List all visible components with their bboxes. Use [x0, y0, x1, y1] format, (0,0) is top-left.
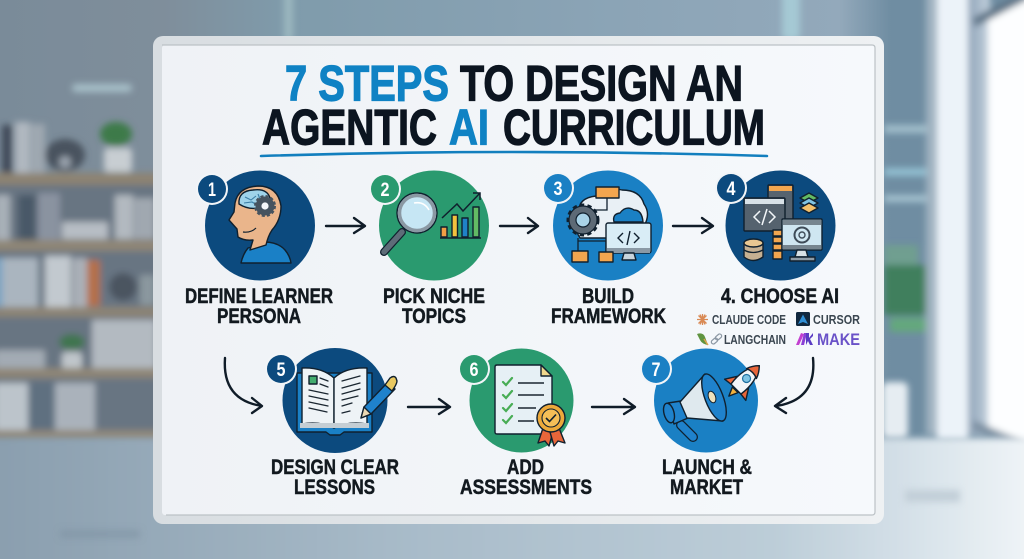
logo: LangChain [697, 333, 786, 347]
step 7: launch and market [640, 348, 770, 499]
label [185, 285, 333, 328]
title: AI [449, 99, 489, 155]
label: BUILD [582, 285, 634, 308]
title [262, 56, 765, 155]
logo: Claude Code: CLAUDE CODE [712, 313, 786, 327]
label: PERSONA [217, 305, 301, 328]
icon: code windows, database and layers [726, 170, 836, 280]
arrow 5 to 6 [408, 399, 450, 414]
label: ADD [507, 456, 544, 479]
label: TOPICS [402, 305, 466, 328]
badge 3 [542, 172, 574, 204]
label [271, 456, 399, 499]
icon: learner head with brain and gear [205, 170, 315, 280]
badge 6: 6 [470, 360, 478, 381]
badge 2: 2 [380, 180, 390, 201]
logo: Make [796, 330, 860, 349]
badge 5: 5 [276, 360, 286, 381]
title underline [261, 152, 767, 156]
step 1: define learner persona [185, 170, 333, 328]
step 3: build framework [542, 170, 666, 328]
badge 2 [369, 173, 401, 205]
arrow 6 to 7 [592, 399, 635, 414]
badge 6 [458, 353, 490, 385]
logo: Make: MAKE [817, 330, 860, 349]
badge 1 [196, 173, 228, 205]
step 4: choose AI [697, 170, 860, 349]
label [383, 285, 485, 328]
panel: whiteboard frame [153, 36, 884, 524]
label [551, 285, 666, 328]
badge 4: 4 [726, 179, 736, 200]
curved arrow into step 5 [225, 358, 262, 413]
arrow 1 to 2 [326, 218, 365, 233]
logo: Cursor: CURSOR [813, 313, 860, 327]
label [460, 456, 592, 499]
step 5: design clear lessons [265, 348, 399, 499]
badge 5 [265, 353, 297, 385]
label: 4. CHOOSE AI [721, 285, 839, 308]
step 2: pick niche topics [369, 170, 489, 328]
logo: Claude Code [697, 313, 786, 327]
icon: magnifier and growth chart [379, 170, 489, 280]
label: LAUNCH & [662, 456, 752, 479]
label: MARKET [670, 476, 743, 499]
label: PICK NICHE [383, 285, 485, 308]
curved arrow from step 4 into step 7 [775, 358, 813, 413]
icon: open book and pencil [282, 348, 397, 453]
icon: megaphone and rocket [654, 348, 770, 452]
step 6: add assessments [458, 348, 592, 499]
badge 1: 1 [208, 180, 216, 201]
title: 7 STEPS [285, 56, 449, 112]
logo: Cursor [796, 312, 860, 327]
label: FRAMEWORK [551, 305, 666, 328]
arrow 2 to 3 [500, 218, 538, 233]
badge 7 [640, 353, 672, 385]
icon: framework with gear, cloud and monitor [553, 170, 663, 280]
label: DESIGN CLEAR [271, 456, 399, 479]
title: AGENTIC [262, 99, 437, 155]
badge 4 [715, 172, 747, 204]
icon: checklist and award badge [470, 348, 574, 452]
label [662, 456, 752, 499]
arrow 3 to 4 [673, 218, 713, 233]
badge 3: 3 [554, 179, 562, 200]
label: ASSESSMENTS [460, 476, 592, 499]
logo: LangChain: LANGCHAIN [724, 333, 786, 347]
title: CURRICULUM [503, 99, 765, 155]
title: TO DESIGN AN [460, 56, 743, 112]
badge 7: 7 [652, 360, 660, 381]
label: LESSONS [294, 476, 375, 499]
label: DEFINE LEARNER [185, 285, 333, 308]
